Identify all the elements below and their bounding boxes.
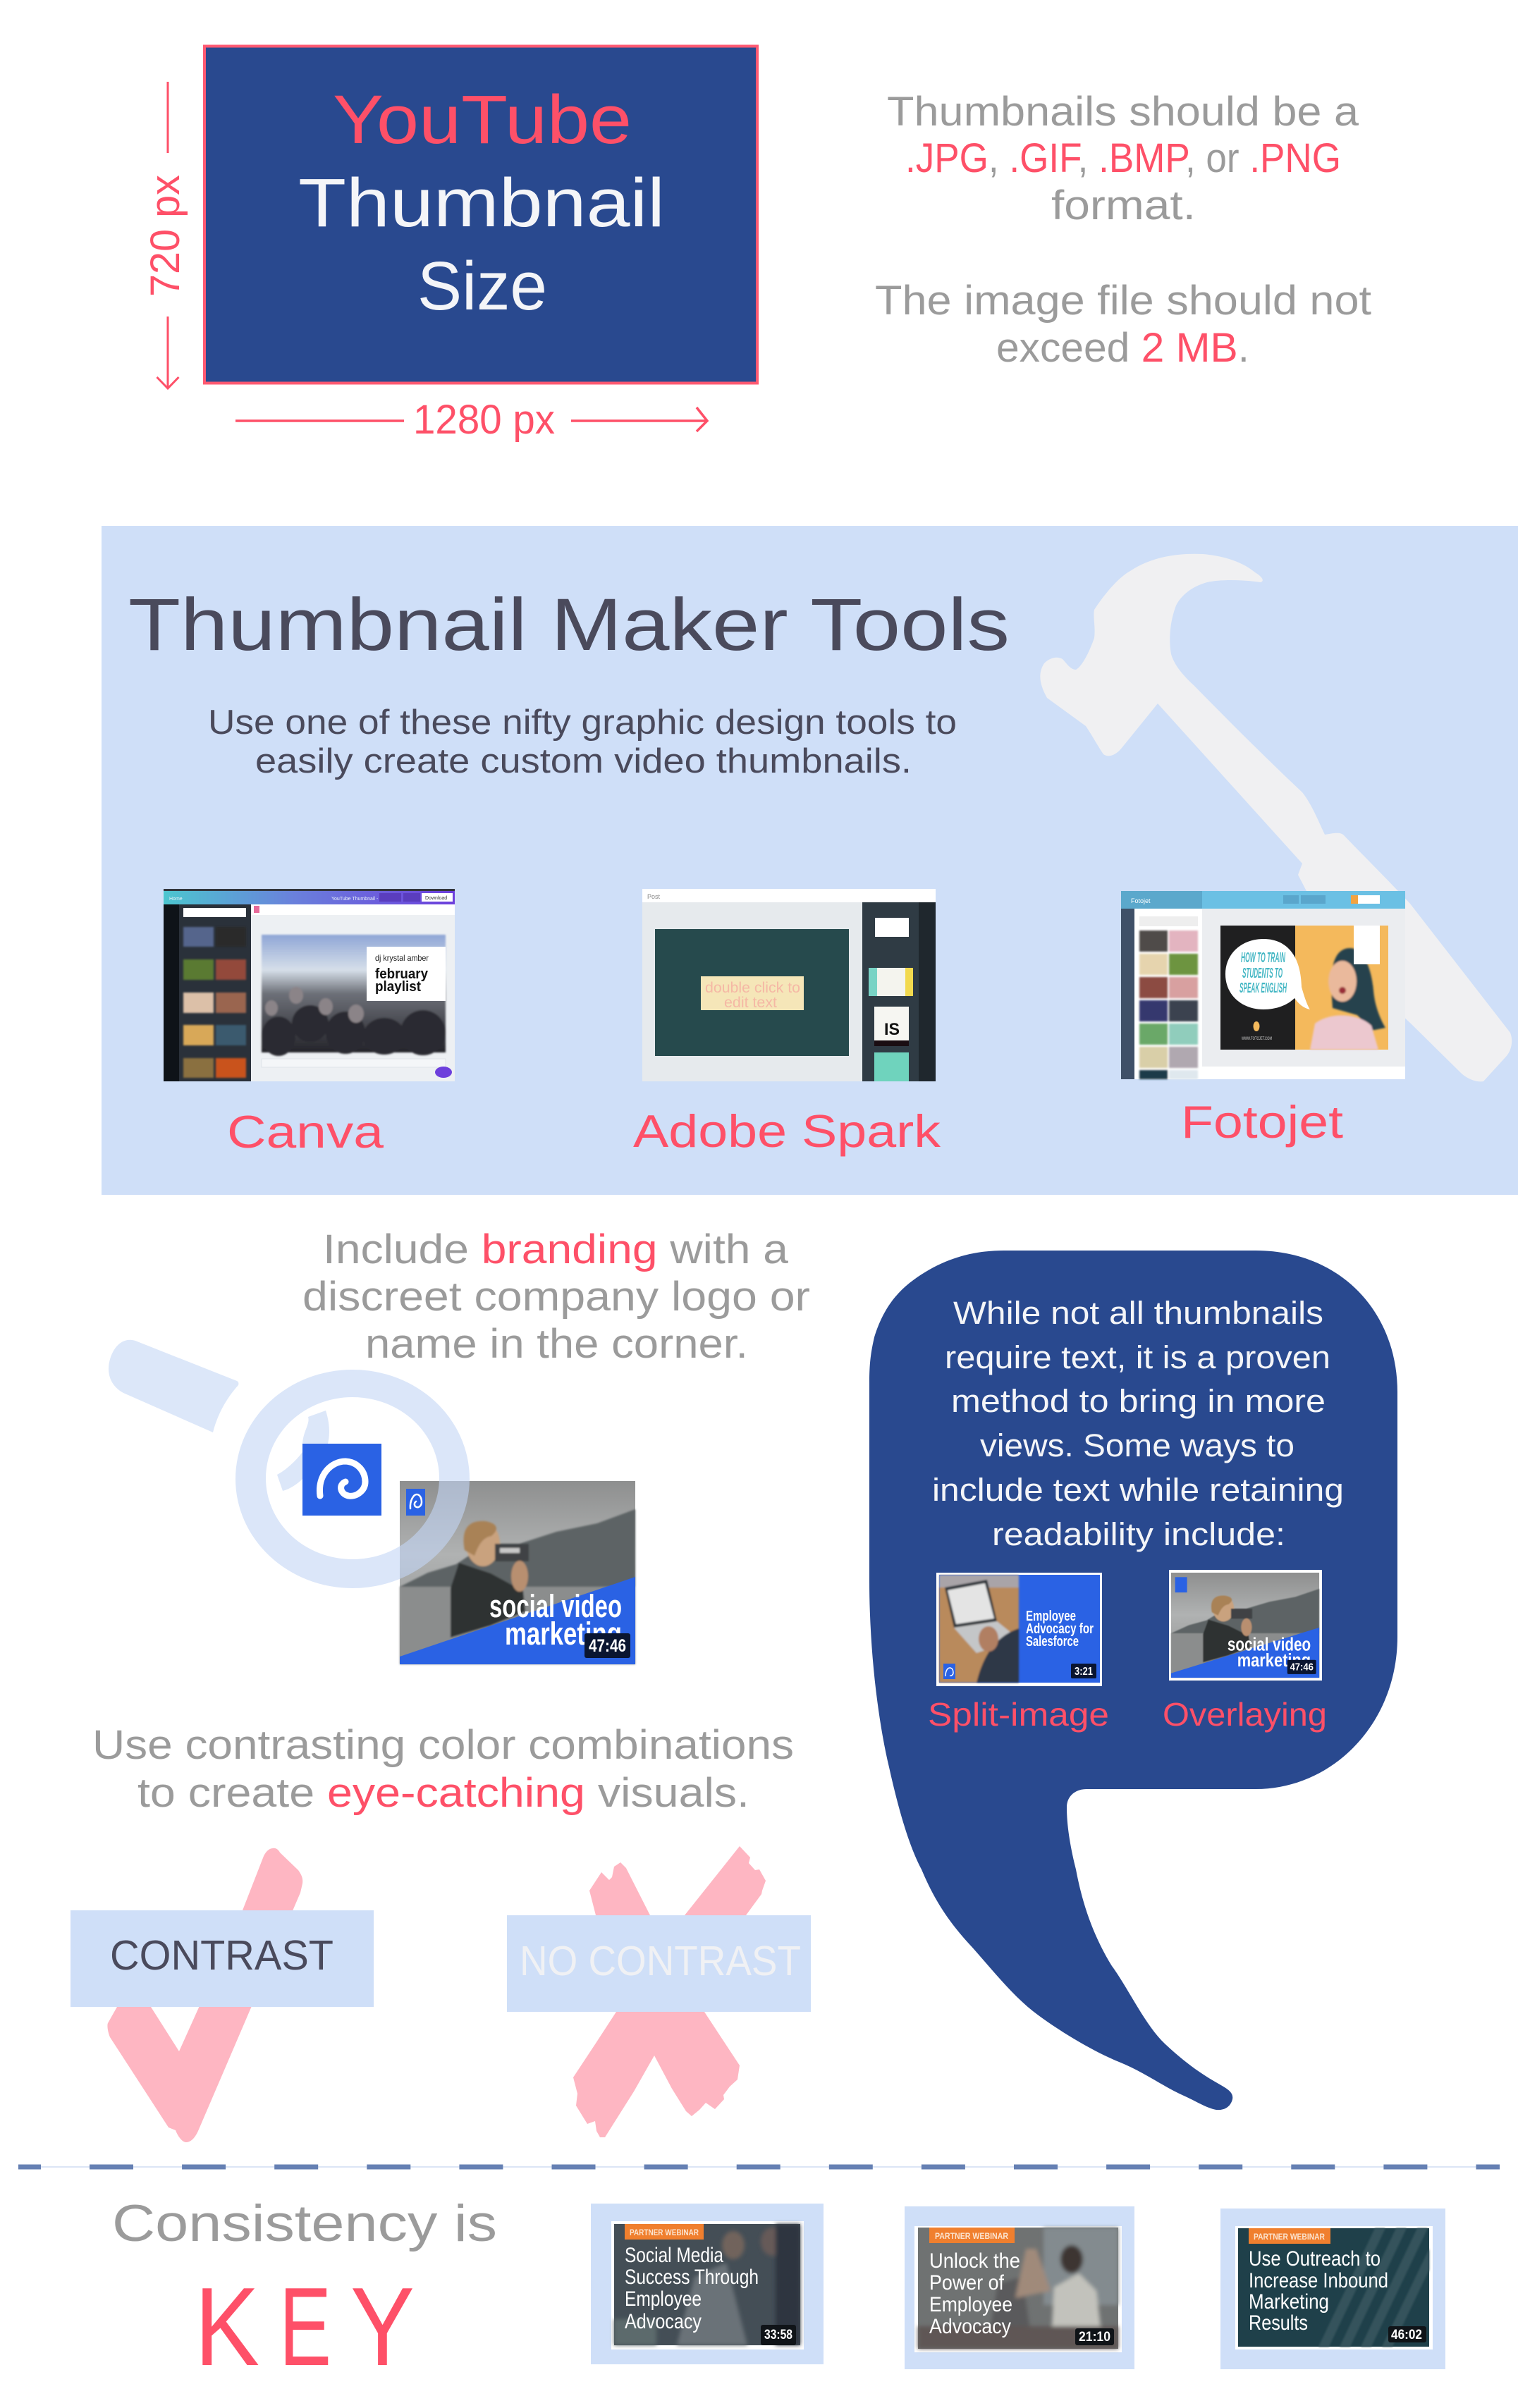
consistency example: thumbnail 2: PARTNER WEBINAR (935, 2231, 1008, 2241)
icon: hammer (1040, 554, 1512, 1081)
icon: company logo (302, 1444, 381, 1516)
screenshot: Adobe Spark: double click to (705, 980, 800, 996)
heading: key: Y (350, 2265, 415, 2389)
branding tip text: Include branding with a (323, 1227, 789, 1272)
contrast tip text: to create eye-catching visuals. (137, 1770, 749, 1816)
screenshot: Canva: Home (169, 897, 183, 902)
example thumbnail: overlaying (1169, 1570, 1322, 1681)
consistency example: thumbnail 3: 46:02 (1391, 2328, 1422, 2342)
branding example thumbnail: social video (489, 1588, 622, 1624)
consistency example: thumbnail 2: 21:10 (1079, 2330, 1110, 2345)
screenshot: Fotojet: HOW TO TRAIN (1241, 950, 1285, 966)
branding example thumbnail: 47:46 (589, 1636, 626, 1656)
label: Fotojet: Fotojet (1181, 1096, 1343, 1148)
consistency example: thumbnail 3: Marketing (1249, 2290, 1329, 2314)
good contrast example (71, 1848, 374, 2142)
size box title (298, 81, 665, 324)
example thumbnail: overlaying: 47:46 (1290, 1661, 1314, 1673)
panel intro text: Use one of these nifty graphic design tools to (208, 704, 957, 742)
speech bubble (869, 1251, 1397, 2110)
arrow: height 720 px (142, 82, 188, 388)
example thumbnail: overlaying: social video (1228, 1634, 1311, 1654)
consistency example: thumbnail 2: Employee (929, 2293, 1012, 2316)
screenshot: Canva: Download (425, 896, 447, 901)
example thumbnail: split-image: Salesforce (1026, 1634, 1079, 1650)
arrow: height 720 px: 720 px (142, 175, 188, 297)
screenshot: Adobe Spark: IS (884, 1020, 900, 1039)
screenshot: Fotojet: Fotojet (1131, 897, 1151, 904)
screenshot: Canva: playlist (375, 979, 421, 995)
label: Canva: Canva (227, 1106, 384, 1157)
screenshot: Canva: dj krystal amber (375, 953, 429, 963)
format requirements text: .JPG, .GIF, .BMP, or .PNG (905, 135, 1341, 181)
consistency example: thumbnail 2 (905, 2206, 1134, 2369)
contrast sample text: CONTRAST (110, 1932, 333, 1979)
example thumbnail: split-image: 3:21 (1075, 1666, 1093, 1678)
consistency example: thumbnail 1: PARTNER WEBINAR (630, 2228, 699, 2237)
screenshot: Canva (164, 889, 455, 1081)
label: Adobe Spark: Adobe Spark (633, 1105, 941, 1157)
no-contrast sample text: NO CONTRAST (520, 1938, 801, 1984)
size diagram (142, 47, 757, 443)
size box title: Thumbnail (298, 164, 665, 241)
panel intro text (208, 704, 957, 780)
branding tip text: name in the corner. (365, 1321, 748, 1367)
heading: consistency is: Consistency is (112, 2195, 497, 2252)
consistency example: thumbnail 2: Unlock the (929, 2249, 1020, 2273)
label: overlaying: Overlaying (1163, 1696, 1327, 1733)
screenshot: Canva: YouTube Thumbnail - Untitled (331, 897, 396, 902)
screenshot: Adobe Spark (642, 889, 936, 1081)
bubble text: readability include: (992, 1516, 1285, 1552)
contrast tip text: Use contrasting color combinations (92, 1722, 794, 1768)
consistency example: thumbnail 1: Social Media (625, 2244, 723, 2267)
bubble text: method to bring in more (951, 1383, 1326, 1419)
label: split-image: Split-image (928, 1696, 1109, 1733)
heading: key (195, 2265, 415, 2389)
screenshot: Fotojet: WWW.FOTOJET.COM (1242, 1037, 1272, 1041)
panel: thumbnail maker tools (102, 526, 1518, 1195)
consistency example: thumbnail 2: Power of (929, 2271, 1005, 2295)
consistency example: thumbnail 1: 33:58 (764, 2328, 792, 2342)
example thumbnail: overlaying: marketing (1237, 1650, 1311, 1671)
thumbnail size box (204, 47, 757, 383)
format requirements text: exceed 2 MB. (996, 325, 1249, 371)
arrow: width 1280 px (235, 397, 707, 443)
bubble text (932, 1295, 1344, 1552)
size box title: Size (417, 247, 547, 324)
screenshot: Fotojet: STUDENTS TO (1242, 966, 1283, 981)
example thumbnail: split-image: Advocacy for (1026, 1621, 1094, 1637)
screenshot: Canva: february (375, 966, 429, 982)
icon: cross mark (573, 1846, 766, 2137)
contrast tip text (92, 1722, 794, 1816)
consistency example: thumbnail 2: Advocacy (929, 2315, 1011, 2338)
bubble text: include text while retaining (932, 1472, 1344, 1508)
poor contrast example (507, 1846, 811, 2137)
example thumbnail: split-image (936, 1573, 1102, 1686)
format requirements text (875, 89, 1371, 371)
consistency example: thumbnail 3 (1220, 2209, 1445, 2369)
consistency example: thumbnail 3: Increase Inbound (1249, 2269, 1388, 2292)
example thumbnail: split-image: Employee (1026, 1609, 1076, 1624)
contrast sample box (71, 1910, 374, 2007)
divider line (18, 2166, 1500, 2168)
icon: magnifying glass (109, 1340, 470, 1588)
screenshot: Adobe Spark: Post (647, 893, 661, 900)
screenshot: Fotojet: SPEAK ENGLISH (1240, 981, 1287, 996)
arrow: width 1280 px: 1280 px (413, 397, 555, 443)
consistency example: thumbnail 1: Success Through (625, 2266, 759, 2289)
format requirements text: The image file should not (875, 278, 1371, 324)
branding example thumbnail (400, 1481, 635, 1664)
bubble text: require text, it is a proven (945, 1339, 1330, 1375)
bubble text: While not all thumbnails (953, 1295, 1323, 1331)
consistency example: thumbnail 3: PARTNER WEBINAR (1254, 2232, 1325, 2242)
size box title: YouTube (333, 81, 632, 158)
bubble text: views. Some ways to (980, 1427, 1294, 1463)
consistency example: thumbnail 1: Employee (625, 2287, 702, 2311)
panel intro text: easily create custom video thumbnails. (255, 742, 912, 780)
consistency example: thumbnail 3: Use Outreach to (1249, 2247, 1381, 2271)
heading: key: E (279, 2265, 331, 2389)
consistency example: thumbnail 1 (591, 2204, 824, 2364)
heading: key: K (195, 2265, 259, 2389)
branding tip text (302, 1227, 810, 1367)
format requirements text: format. (1051, 183, 1196, 228)
branding tip text: discreet company logo or (302, 1274, 810, 1320)
format requirements text: Thumbnails should be a (887, 89, 1359, 135)
no-contrast sample box (507, 1915, 811, 2012)
icon: check mark (107, 1848, 302, 2142)
screenshot: Fotojet (1121, 891, 1405, 1079)
screenshot: Adobe Spark: edit text (724, 995, 777, 1011)
consistency example: thumbnail 3: Results (1249, 2311, 1308, 2335)
branding example thumbnail: marketing (505, 1616, 622, 1652)
heading: thumbnail maker tools: Thumbnail Maker Tools (128, 584, 1010, 666)
consistency example: thumbnail 1: Advocacy (625, 2310, 702, 2333)
